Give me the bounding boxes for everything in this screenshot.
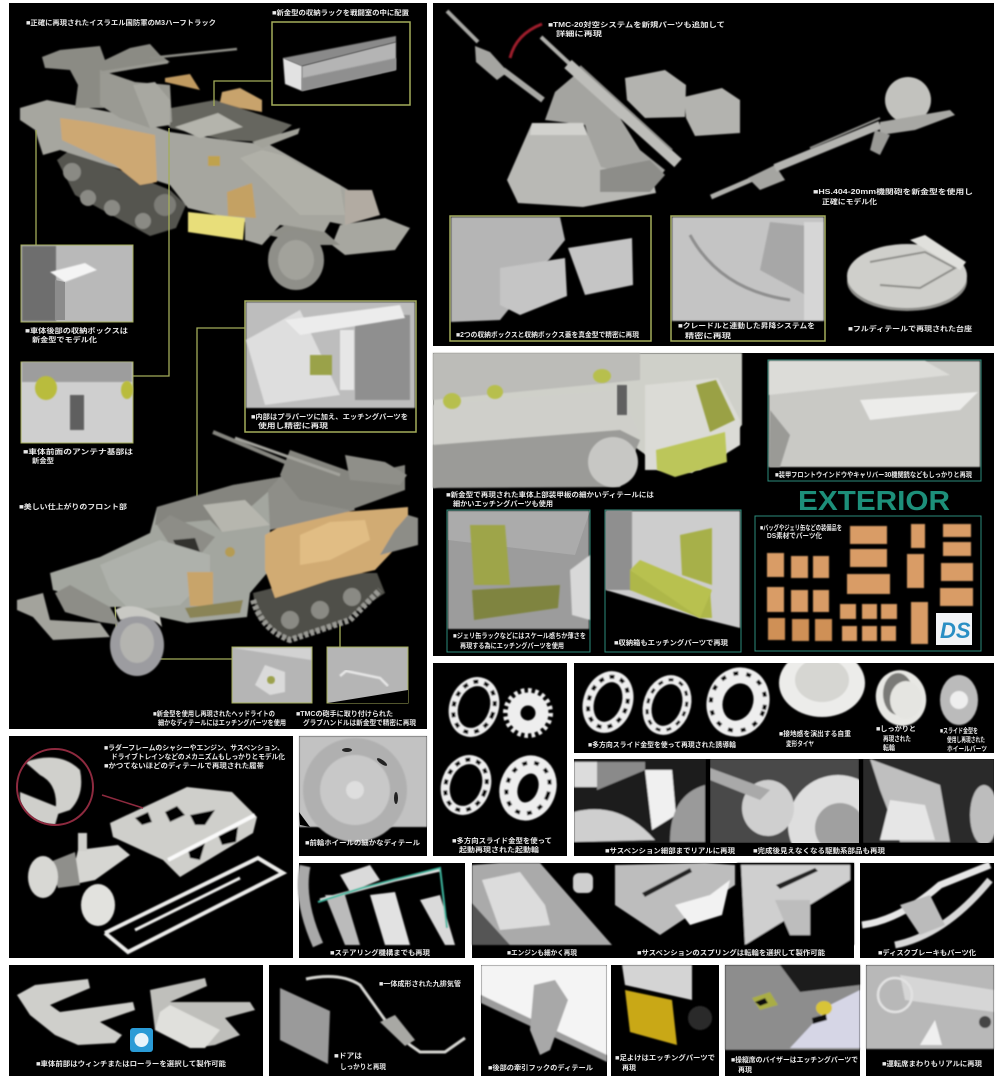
panel: front wheel detail: ■前輪ホイールの細かなディテール [305,838,420,847]
caption: HS.404: 正確にモデル化 [822,197,877,206]
caption: antenna base: ■車体前面のアンテナ基部は [23,447,133,456]
panel: road wheels and tyre: ■スライド金型を [940,726,978,735]
caption: hull: 細かいエッチングパーツも使用 [453,499,553,508]
panel: suspension photos: ■完成後見えなくなる駆動系部品も再現 [753,846,885,855]
inset: windshield: ■装甲フロントウインドウやキャリバー30機関銃などもしっかりと再現 [775,470,972,479]
caption: grab handle: グラブハンドルは新金型で精密に再現 [303,718,416,727]
panel: etched mudflap [611,965,719,1076]
inset: storage boxes: ■2つの収納ボックスと収納ボックス蓋を真金型で精密に再現 [456,330,639,339]
panel: steering [299,863,465,958]
panel: suspension photos: ■サスペンション細部までリアルに再現 [605,846,735,855]
panel: resin-style bags and cans [755,516,981,651]
illustration: track detail [17,749,143,825]
panel: steering: ■ステアリング機構までも再現 [330,948,430,957]
panel: sprocket and idler wheels [433,663,567,856]
caption: TMC-20: 詳細に再現 [556,29,602,38]
panel: exterior [433,353,994,656]
photo: suspension [574,759,706,843]
panel: chassis: ドライブトレインなどのメカニズムもしっかりとモデル化 [111,752,285,761]
caption: TMC-20: ■TMC-20対空システムを新規パーツも追加して [548,20,725,29]
panel: disc brake: ■ディスクブレーキもパーツ化 [878,948,976,957]
icon: choice arrows [130,1028,153,1052]
panel: TMC-20 anti-aircraft system [433,3,994,346]
panel: road wheels and tyre: 再現された [883,734,911,743]
panel: driver visor: 再現 [738,1066,752,1074]
panel: driver visor: ■操縦席のバイザーはエッチングパーツで [731,1055,858,1064]
panel: engine and suspension photos: ■エンジンも細かく再現 [507,948,577,957]
illustration: HS.404 gun [711,77,955,197]
panel: road wheels and tyre [574,663,994,753]
caption: upper vehicle: ■正確に再現されたイスラエル国防軍のM3ハーフトラック [26,18,216,27]
inset: storage boxes [450,216,651,341]
inset: storage box [605,510,741,652]
panel: resin-style bags and cans: DS素材でパーツ化 [767,531,822,540]
panel: driver visor [725,965,860,1076]
panel: engine and suspension photos: ■サスペンションのスプリングは転輪を選択して製作可能 [637,948,825,957]
panel: towing hook: ■後部の牽引フックのディテール [488,1063,593,1072]
caption: headlight: 細かなディテールにはエッチングパーツを使用 [158,718,286,727]
panel: door and muffler: しっかりと再現 [340,1062,386,1071]
panel: road wheels and tyre: 転輪 [883,743,895,752]
caption: base plate: ■フルディテールで再現された台座 [848,324,972,333]
panel: driver's cab: ■運転席まわりもリアルに再現 [882,1059,982,1068]
panel: driver's cab [866,965,994,1076]
panel: main vehicle views [9,3,427,729]
inset: jerry can rack: 再現する為にエッチングパーツを使用 [460,641,564,650]
inset: storage rack [272,22,410,105]
panel: winch or roller: ■車体前部はウィンチまたはローラーを選択して製作可能 [36,1059,226,1068]
panel: road wheels and tyre: 変形タイヤ [786,739,814,748]
photo: rear axle [863,759,998,845]
panel: disc brake [860,863,994,958]
caption: antenna base: 新金型 [32,456,54,465]
caption: hull: ■新金型で再現された車体上部装甲板の細かいディテールには [446,490,654,499]
inset: rear storage box [21,245,133,322]
inset: grab handle [327,647,408,703]
panel: road wheels and tyre: ■接地感を演出する自重 [779,729,851,738]
inset: headlight [232,647,312,703]
vehicle: upper half-track [20,44,410,290]
panel: door and muffler: ■一体成形された九排気管 [379,979,461,988]
inset: antenna base [21,362,133,443]
panel: towing hook [481,965,607,1076]
inset: windshield [768,360,981,481]
panel: chassis [9,736,293,958]
illustration: chassis and frame [28,787,283,952]
inset: cradle: 精密に再現 [685,331,731,340]
illustration: TMC-20 mount [447,11,955,207]
inset: jerry can rack [447,510,590,652]
caption: rear box: 新金型でモデル化 [32,335,97,344]
inset: storage box: ■収納箱もエッチングパーツで再現 [614,638,728,647]
caption: interior: 使用し精密に再現 [258,421,328,430]
panel: sprocket and idler wheels: ■多方向スライド金型を使って [452,836,552,845]
panel: winch or roller [9,965,263,1076]
photo: hull close-up [433,353,742,488]
panel: front wheel detail [299,736,427,856]
panel: door and muffler: ■ドアは [334,1052,362,1060]
caption: grab handle: ■TMCの砲手に取り付けられた [296,709,393,718]
vehicle: lower half-track [17,432,418,676]
panel: etched mudflap: ■足よけはエッチングパーツで [615,1053,715,1062]
photo: drive line [710,759,859,843]
heading: EXTERIOR: EXTERIOR [798,485,950,516]
caption: storage rack: ■新金型の収納ラックを戦闘室の中に配置 [272,8,409,17]
caption: rear box: ■車体後部の収納ボックスは [25,326,128,335]
panel: etched mudflap: 再現 [622,1064,636,1072]
panel: road wheels and tyre: ホイールパーツ [947,745,987,753]
panel: chassis: ■ラダーフレームのシャシーやエンジン、サスペンション、 [104,743,284,752]
panel: engine and suspension photos [472,863,854,958]
caption: headlight: ■新金型を使用し再現されたヘッドライトの [153,709,275,718]
illustration: turret base plate [847,235,967,311]
panel: resin-style bags and cans: ■バッグやジェリ缶などの装備品を [760,523,842,532]
panel: road wheels and tyre: ■多方向スライド金型を使って再現された誘導輪 [588,740,736,749]
inset: cradle: ■クレードルと連動した昇降システムを [678,321,815,330]
icon: DS logo: DS [940,618,971,643]
panel: road wheels and tyre: ■しっかりと [876,724,916,733]
caption: HS.404: ■HS.404-20mm機関砲を新金型を使用し [813,187,973,196]
inset: jerry can rack: ■ジェリ缶ラックなどにはスケール感ちか薄さを [453,631,586,640]
callout lines upper vehicle [36,81,340,659]
panel: chassis: ■かつてないほどのディテールで再現された履帯 [104,761,264,770]
icon: DS logo [936,613,972,645]
panel: sprocket and idler wheels: 起動再現された起動輪 [459,845,539,854]
inset: cradle [671,216,825,341]
caption: front: ■美しい仕上がりのフロント部 [19,502,127,511]
panel: suspension photos [574,759,994,856]
inset: interior [245,301,416,432]
caption: interior: ■内部はプラパーツに加え、エッチングパーツを [251,412,408,421]
panel: door and muffler [269,965,474,1076]
